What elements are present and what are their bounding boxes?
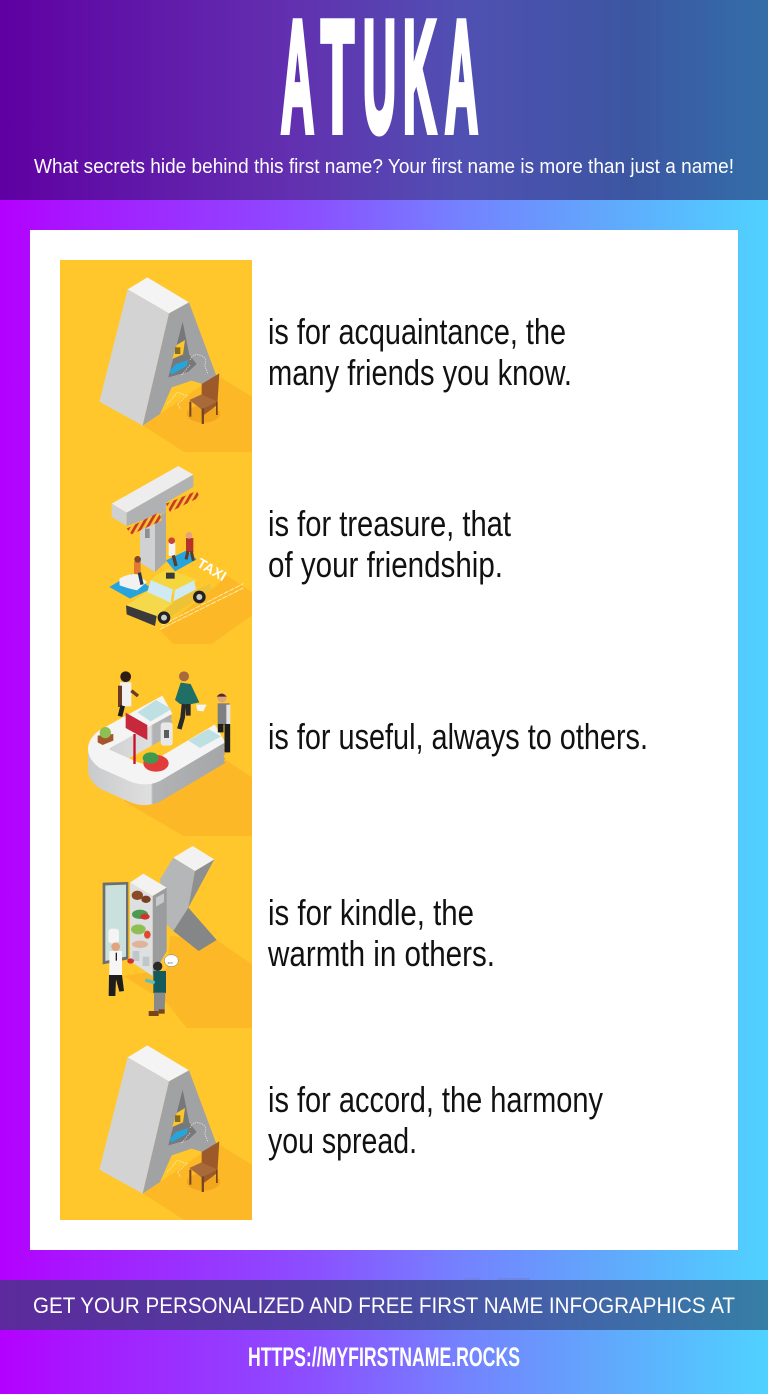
- person: customer with speech bubble: [145, 955, 178, 1016]
- text: letter T meaning: is for treasure, that: [268, 503, 511, 544]
- person: waitress: [118, 671, 138, 716]
- icon: isometric letter A with desk and chair: [60, 260, 252, 452]
- footer call-to-action text: GET YOUR PERSONALIZED AND FREE FIRST NAME INFOGRAPHICS AT: [33, 1293, 735, 1318]
- person: chef: [108, 929, 134, 996]
- text: letter A meaning: [268, 311, 572, 393]
- icon: isometric letter T with taxi: [60, 452, 252, 644]
- person: man in vest: [217, 693, 230, 752]
- header band: [0, 0, 768, 200]
- text: letter A meaning: is for acquaintance, the: [268, 311, 566, 352]
- text: letter U meaning: is for useful, always to others.: [268, 716, 648, 757]
- person: customer with speech bubble: ...: [167, 958, 173, 965]
- text: second letter A meaning: [268, 1079, 603, 1161]
- icon: isometric letter A with desk and chair (repeat): [60, 1028, 252, 1220]
- text: letter A meaning: many friends you know.: [268, 352, 572, 393]
- footer call-to-action band: [0, 1278, 768, 1330]
- text: letter T meaning: [268, 503, 511, 585]
- text: letter K meaning: [267, 892, 495, 974]
- icon: isometric letter U with food counter: [60, 644, 252, 836]
- white content panel: [30, 230, 738, 1250]
- text: letter K meaning: warmth in others.: [267, 933, 495, 974]
- text: second letter A meaning: you spread.: [268, 1120, 417, 1161]
- person: customer: [175, 671, 207, 729]
- text: letter K meaning: is for kindle, the: [268, 892, 474, 933]
- title: [281, 0, 478, 165]
- footer url: HTTPS://MYFIRSTNAME.ROCKS: [248, 1342, 520, 1372]
- subtitle: What secrets hide behind this first name? Your first name is more than just a name!: [34, 156, 734, 178]
- text: second letter A meaning: is for accord, the harmony: [268, 1079, 603, 1120]
- icon: isometric letter T with taxi: TAXI: [195, 555, 229, 584]
- icon: isometric letter K with fridge: [60, 836, 252, 1028]
- text: letter T meaning: of your friendship.: [268, 544, 503, 585]
